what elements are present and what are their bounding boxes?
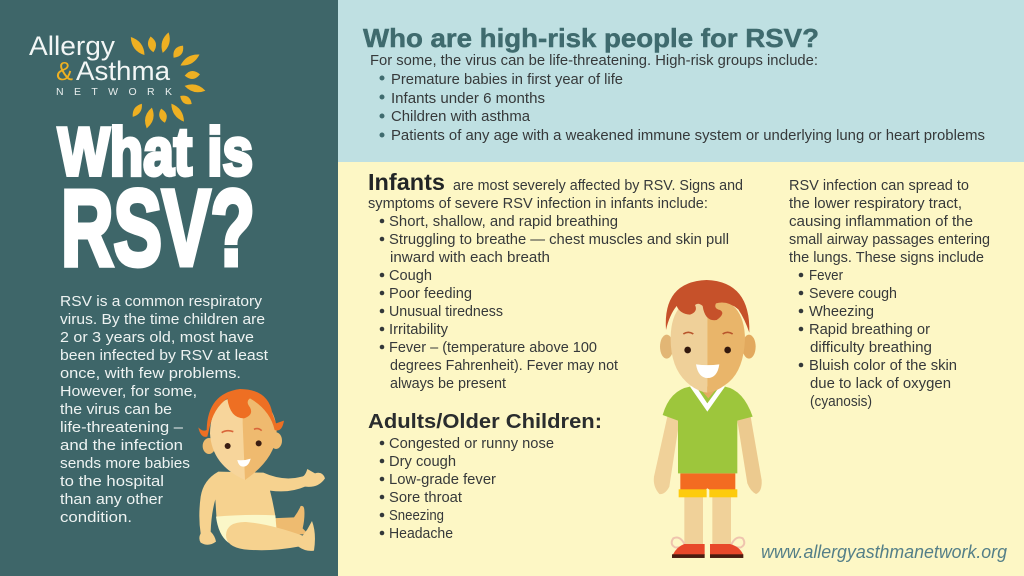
text block: RSV description: However, for some, (60, 383, 197, 400)
boy legs (684, 493, 703, 545)
list: lower respiratory signs: Severe cough (809, 285, 897, 302)
heading: adults: Adults/Older Children: (368, 411, 602, 433)
list: adult symptoms: Dry cough (389, 453, 456, 470)
list: lower respiratory signs: Wheezing (809, 303, 874, 320)
list: infant symptoms: Fever – (temperature above 100 (389, 339, 597, 356)
list: infant symptoms (380, 213, 729, 392)
panel: left sidebar (0, 0, 338, 576)
list: high-risk groups: Infants under 6 months (391, 90, 545, 107)
logo: Allergy & Asthma Network: Asthma (76, 56, 171, 86)
list: infant symptoms: Unusual tiredness (389, 303, 503, 320)
text: lower respiratory: causing inflammation of the (789, 213, 973, 230)
list: high-risk groups (380, 71, 985, 144)
list: high-risk groups: Premature babies in first year of life (391, 71, 623, 88)
boy hair (666, 280, 749, 333)
baby far leg (270, 506, 308, 536)
list: lower respiratory signs: difficulty breathing (810, 339, 932, 356)
logo: Allergy & Asthma Network: & (56, 56, 73, 86)
list: adult symptoms: Sore throat (389, 489, 463, 506)
boy shoes (672, 537, 685, 548)
boy arms (654, 417, 680, 494)
baby near leg (226, 521, 315, 551)
title: What is RSV?: RSV? (61, 167, 255, 288)
title: What is RSV? (58, 114, 255, 288)
list: infant symptoms: Irritability (389, 321, 448, 338)
list: lower respiratory signs: Fever (809, 267, 843, 284)
text block: RSV description: to the hospital (60, 473, 164, 490)
list: infant symptoms: always be present (390, 375, 507, 392)
list: adult symptoms (380, 435, 554, 542)
text block: RSV description (60, 293, 269, 526)
baby eyes and mouth (225, 443, 231, 449)
text block: RSV description: RSV is a common respiratory (60, 293, 263, 310)
list: lower respiratory signs: Rapid breathing or (809, 321, 930, 338)
text: infants intro (368, 177, 743, 212)
list: infant symptoms: degrees Fahrenheit). Fever may not (390, 357, 619, 374)
list: lower respiratory signs: Bluish color of the skin (809, 357, 957, 374)
list: lower respiratory signs: due to lack of oxygen (810, 375, 951, 392)
icon: sun rays (128, 31, 206, 129)
boy eyes and mouth (684, 347, 691, 353)
list: lower respiratory signs (799, 267, 957, 410)
text block: RSV description: and the infection (60, 437, 183, 454)
text: lower respiratory: the lower respiratory tract, (789, 195, 962, 212)
text block: RSV description: virus. By the time children are (60, 311, 265, 328)
list: adult symptoms: Congested or runny nose (389, 435, 554, 452)
panel: high-risk people (338, 0, 1024, 162)
list: infant symptoms: Cough (389, 267, 432, 284)
text block: RSV description: been infected by RSV at least (60, 347, 269, 364)
logo: Allergy & Asthma Network: NETWORK (56, 86, 172, 98)
logo: Allergy & Asthma Network: Allergy (29, 31, 116, 61)
list: lower respiratory signs: (cyanosis) (810, 393, 872, 410)
text: high-risk intro: For some, the virus can be life-threatening. High-risk groups include: (370, 52, 818, 69)
title: What is RSV?: What is (58, 114, 253, 190)
text block: RSV description: than any other (60, 491, 163, 508)
text: infants intro: symptoms of severe RSV infection in infants include: (368, 195, 708, 212)
text block: RSV description: life-threatening – (60, 419, 184, 436)
logo: Allergy & Asthma Network (29, 31, 206, 129)
list: adult symptoms: Low-grade fever (389, 471, 496, 488)
list: high-risk groups: Children with asthma (391, 108, 531, 125)
panel: symptoms (338, 162, 1024, 576)
list: infant symptoms: Poor feeding (389, 285, 472, 302)
text block: RSV description: the virus can be (60, 401, 172, 418)
baby torso and arms (199, 469, 325, 545)
baby diaper (216, 515, 277, 543)
list: infant symptoms: Struggling to breathe — chest muscles and skin pull (389, 231, 729, 248)
list: adult symptoms: Sneezing (389, 507, 444, 524)
boy head (671, 297, 707, 393)
text: lower respiratory: RSV infection can spread to (789, 177, 969, 194)
baby head (210, 396, 245, 480)
text: lower respiratory (789, 177, 990, 266)
list: infant symptoms: Short, shallow, and rapid breathing (389, 213, 618, 230)
list: adult symptoms: Headache (389, 525, 453, 542)
text: lower respiratory: the lungs. These signs include (789, 249, 984, 266)
text: lower respiratory: small airway passages entering (789, 231, 990, 248)
boy ears (660, 335, 673, 359)
text block: RSV description: sends more babies (60, 455, 190, 472)
list: high-risk groups: Patients of any age with a weakened immune system or underlying lung or heart problems (391, 127, 985, 144)
boy shorts (680, 473, 735, 490)
heading: infants: Infants (368, 169, 445, 195)
boy shirt (663, 387, 753, 473)
heading: high-risk: Who are high-risk people for RSV? (363, 23, 819, 53)
list: infant symptoms: inward with each breath (390, 249, 550, 266)
illustration: baby (198, 389, 325, 551)
baby hair (198, 389, 284, 437)
text block: RSV description: 2 or 3 years old, most have (60, 329, 254, 346)
text block: RSV description: once, with few problems. (60, 365, 241, 382)
text block: RSV description: condition. (60, 509, 132, 526)
text: infants intro: are most severely affected by RSV. Signs and (453, 177, 743, 194)
illustration: boy (654, 280, 762, 558)
url: www.allergyasthmanetwork.org (761, 542, 1007, 562)
baby ears (203, 438, 215, 454)
